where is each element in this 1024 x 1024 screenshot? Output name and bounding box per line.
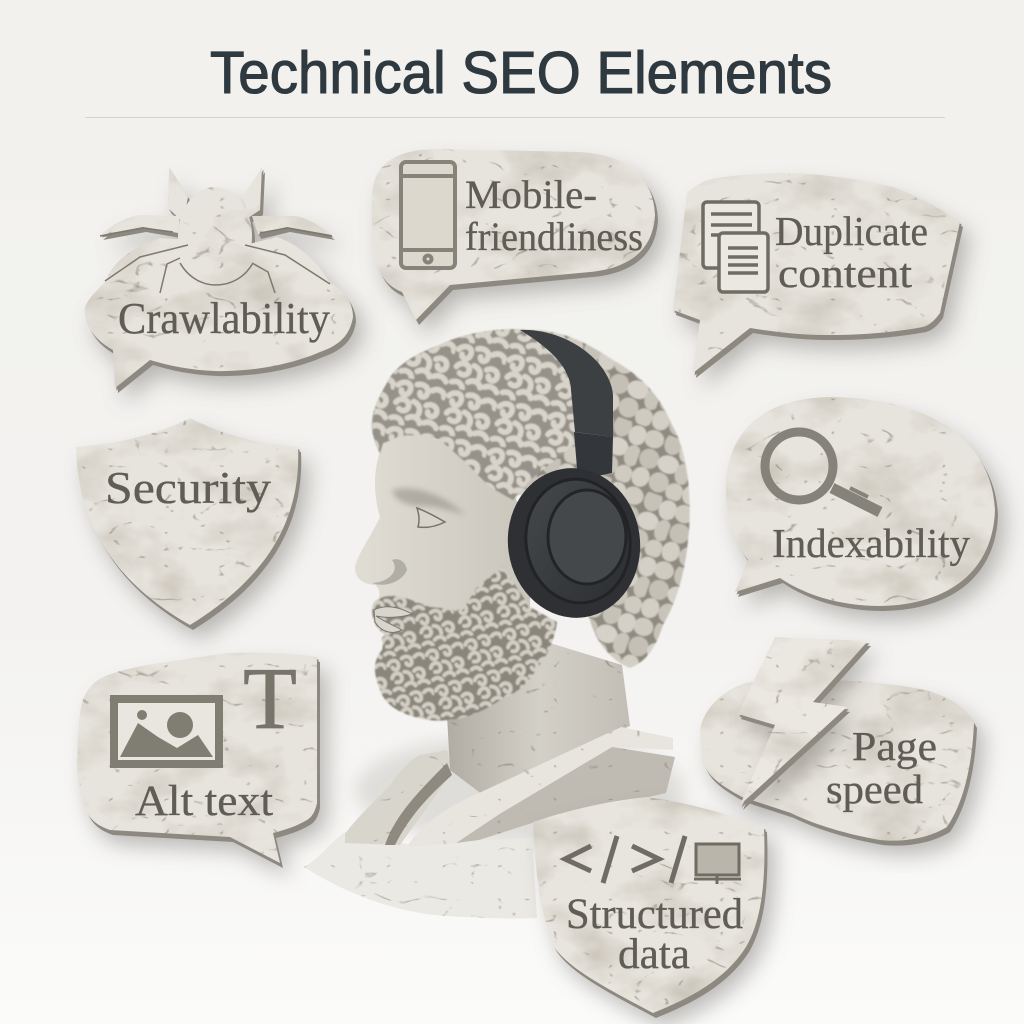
facial details bbox=[372, 488, 465, 585]
label: Alt text: Alt text bbox=[135, 778, 273, 825]
bust bbox=[304, 329, 690, 918]
icon: duplicate documents bbox=[703, 202, 768, 292]
ear cup bbox=[498, 460, 650, 626]
panel: crawlability bbox=[85, 167, 353, 388]
speech bubble stone bbox=[372, 149, 655, 320]
neck bbox=[447, 640, 630, 795]
torso and drape bbox=[304, 750, 537, 918]
brow shadow bbox=[392, 488, 465, 515]
label: Duplicate content: content bbox=[778, 250, 913, 296]
panel: mobile-friendliness bbox=[372, 149, 655, 320]
panel: page speed bbox=[700, 637, 974, 841]
drape band bbox=[407, 727, 675, 847]
ear cup center bbox=[548, 490, 626, 584]
icon: image bbox=[114, 699, 219, 764]
icon: monitor bbox=[694, 844, 741, 884]
label: Structured data bbox=[566, 891, 743, 978]
label: Duplicate content: Duplicate bbox=[775, 208, 928, 254]
label: Indexability: Indexability bbox=[772, 520, 970, 566]
label: Mobile-friendliness: Mobile- bbox=[465, 172, 597, 217]
headphones bbox=[498, 330, 650, 626]
speech bubble stone bbox=[77, 653, 317, 863]
lips bbox=[374, 607, 412, 632]
ear cup ring bbox=[518, 472, 638, 610]
label: Crawlability: Crawlability bbox=[118, 294, 330, 343]
icon: lightning bolt bbox=[738, 637, 868, 805]
label: Page speed bbox=[826, 723, 937, 812]
panel: security bbox=[76, 418, 298, 625]
soft shadow bbox=[355, 735, 685, 845]
front hair curls bbox=[373, 329, 580, 500]
beard bbox=[372, 567, 557, 721]
back of hair bbox=[372, 329, 690, 668]
speech bubble stone bbox=[726, 397, 995, 606]
panel: alt text bbox=[77, 651, 317, 863]
shield stone bbox=[533, 797, 764, 1013]
shield stone bbox=[76, 418, 298, 625]
icon: smartphone bbox=[401, 162, 455, 268]
face bbox=[355, 430, 530, 670]
title: Technical SEO Elements bbox=[210, 40, 832, 106]
icon: letter T: T bbox=[243, 651, 297, 748]
label: Page speed: speed bbox=[826, 766, 923, 812]
yoke bbox=[574, 432, 613, 480]
headband bbox=[520, 330, 613, 437]
label: Mobile-friendliness: friendliness bbox=[465, 214, 643, 259]
speech bubble stone bbox=[673, 173, 960, 373]
eye bbox=[417, 508, 445, 527]
icon: magnifying glass bbox=[765, 432, 880, 512]
panel: indexability bbox=[726, 397, 995, 606]
spider relief lines bbox=[100, 228, 332, 293]
label: Duplicate content bbox=[775, 208, 928, 296]
icon: code symbols bbox=[565, 836, 685, 883]
panel: duplicate content bbox=[673, 173, 960, 373]
label: Structured data: data bbox=[618, 931, 690, 978]
label: Mobile-friendliness bbox=[465, 172, 643, 259]
plate stone bbox=[700, 679, 974, 841]
spider and speech bubble stone bbox=[85, 167, 353, 388]
label: Page speed: Page bbox=[852, 723, 937, 769]
panel: structured data bbox=[533, 797, 764, 1013]
label: Security: Security bbox=[105, 462, 271, 513]
label: Structured data: Structured bbox=[566, 891, 743, 938]
nose shadow bbox=[372, 559, 407, 585]
